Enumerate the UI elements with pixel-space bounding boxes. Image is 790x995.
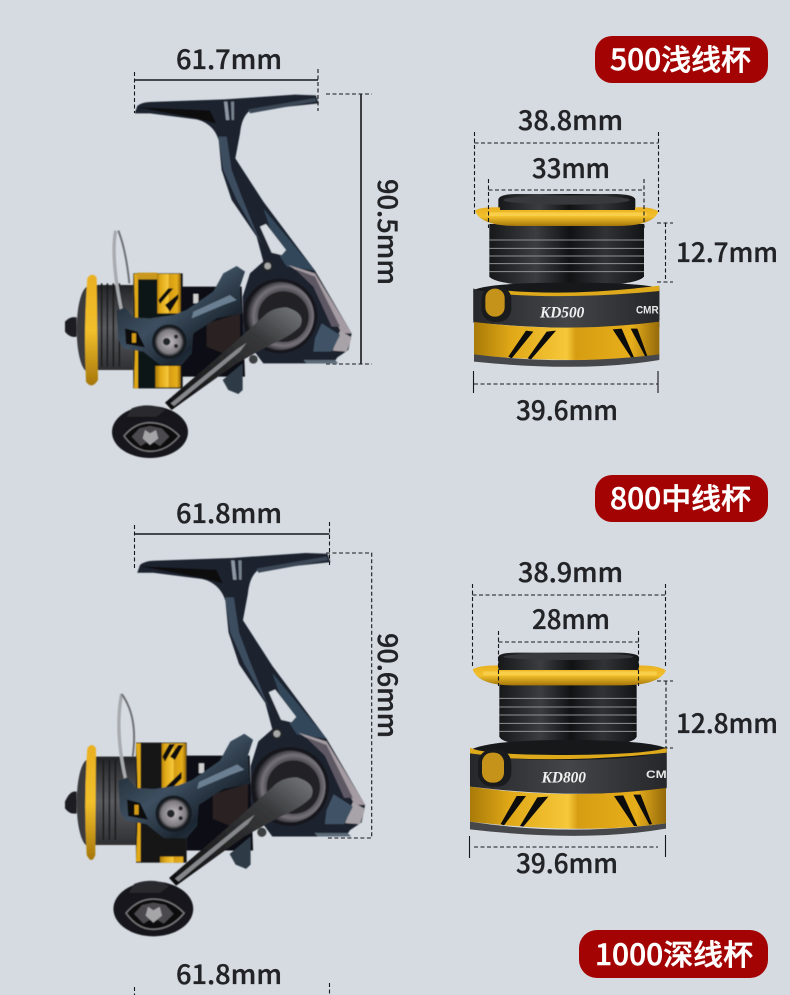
spool knob: [65, 791, 77, 814]
dimension: reel 1 height: [326, 94, 409, 364]
spool body: [77, 759, 100, 846]
reel frame: [112, 95, 352, 458]
dimension: spool 800 outer lip: [472, 551, 666, 668]
gold flange: [85, 745, 96, 860]
model text: KD500: [539, 304, 585, 321]
dimension: spool 500 base: [474, 371, 658, 428]
badge: 1000 deep spool: 1000深线杯: [595, 932, 753, 974]
threaded barrel: [499, 684, 637, 747]
dimension: spool 500 outer lip: 38.8mm: [518, 99, 623, 138]
black band: [470, 740, 667, 787]
dimension: spool 500 inner: [488, 147, 644, 228]
dimension: reel 2 height: 90.6mm: [370, 633, 409, 738]
spool knob: [65, 317, 77, 337]
vent slots: [508, 329, 647, 359]
bottom ring: [470, 822, 666, 836]
gold flange: [85, 275, 98, 385]
dimension: reel 1 width: [134, 38, 318, 113]
spool body: [77, 287, 100, 372]
dimension: reel 3 width: [134, 953, 330, 995]
gold band: [470, 787, 666, 829]
dimension: reel 1 height: 90.5mm: [370, 179, 409, 285]
spool lip: [498, 194, 635, 210]
illustration: spinning reel 1: [65, 95, 352, 458]
dimension: reel 2 height: [326, 553, 409, 838]
dimension: spool 800 depth: 12.8mm: [676, 702, 778, 741]
illustration: spool 800: [470, 653, 667, 836]
illustration: spool 500: CMR: [636, 305, 659, 317]
dimension: spool 500 inner: 33mm: [532, 147, 610, 186]
dimension: spool 500 base: 39.6mm: [516, 389, 618, 428]
dimension: reel 2 width: 61.8mm: [176, 492, 282, 531]
bottom ring: [474, 354, 659, 367]
bail wire: [114, 231, 121, 310]
vent slots: [501, 795, 652, 827]
dimension: spool 500 depth: 12.7mm: [676, 231, 778, 270]
dimension: spool 800 inner: 28mm: [532, 598, 610, 637]
dimension: spool 800 depth: [657, 681, 778, 748]
illustration: spool 500: [473, 194, 659, 367]
threaded barrel: [489, 224, 644, 287]
badge: 800 medium spool: 800中线杯: [610, 476, 751, 518]
black band: [473, 283, 659, 320]
badge: 500 shallow spool: 500浅线杯: [610, 37, 751, 79]
gold flange: [473, 665, 666, 685]
dimension: reel 1 width: 61.7mm: [176, 38, 282, 77]
gold flange: [475, 207, 658, 226]
rotor cup: [136, 743, 187, 863]
dimension: spool 800 outer lip: 38.9mm: [518, 551, 623, 590]
spool lip: [498, 653, 639, 670]
illustration: spinning reel 2: [65, 553, 365, 936]
lock button: [481, 286, 511, 322]
dimension: spool 800 inner: [498, 598, 638, 686]
dimension: spool 500 depth: [657, 223, 778, 282]
gold band: [474, 322, 659, 360]
dimension: spool 500 outer lip: [474, 99, 658, 215]
dimension: spool 800 base: 39.6mm: [516, 842, 618, 881]
dimension: reel 2 width: [134, 492, 330, 568]
reel frame: [113, 553, 365, 936]
bail wire: [119, 694, 130, 797]
illustration: spool 800: CM: [646, 769, 667, 781]
lock button: [478, 749, 511, 787]
rotor cup: [133, 273, 183, 388]
dimension: reel 3 width: 61.8mm: [176, 953, 282, 992]
model text: KD800: [541, 770, 586, 787]
dimension: spool 800 base: [470, 835, 666, 881]
